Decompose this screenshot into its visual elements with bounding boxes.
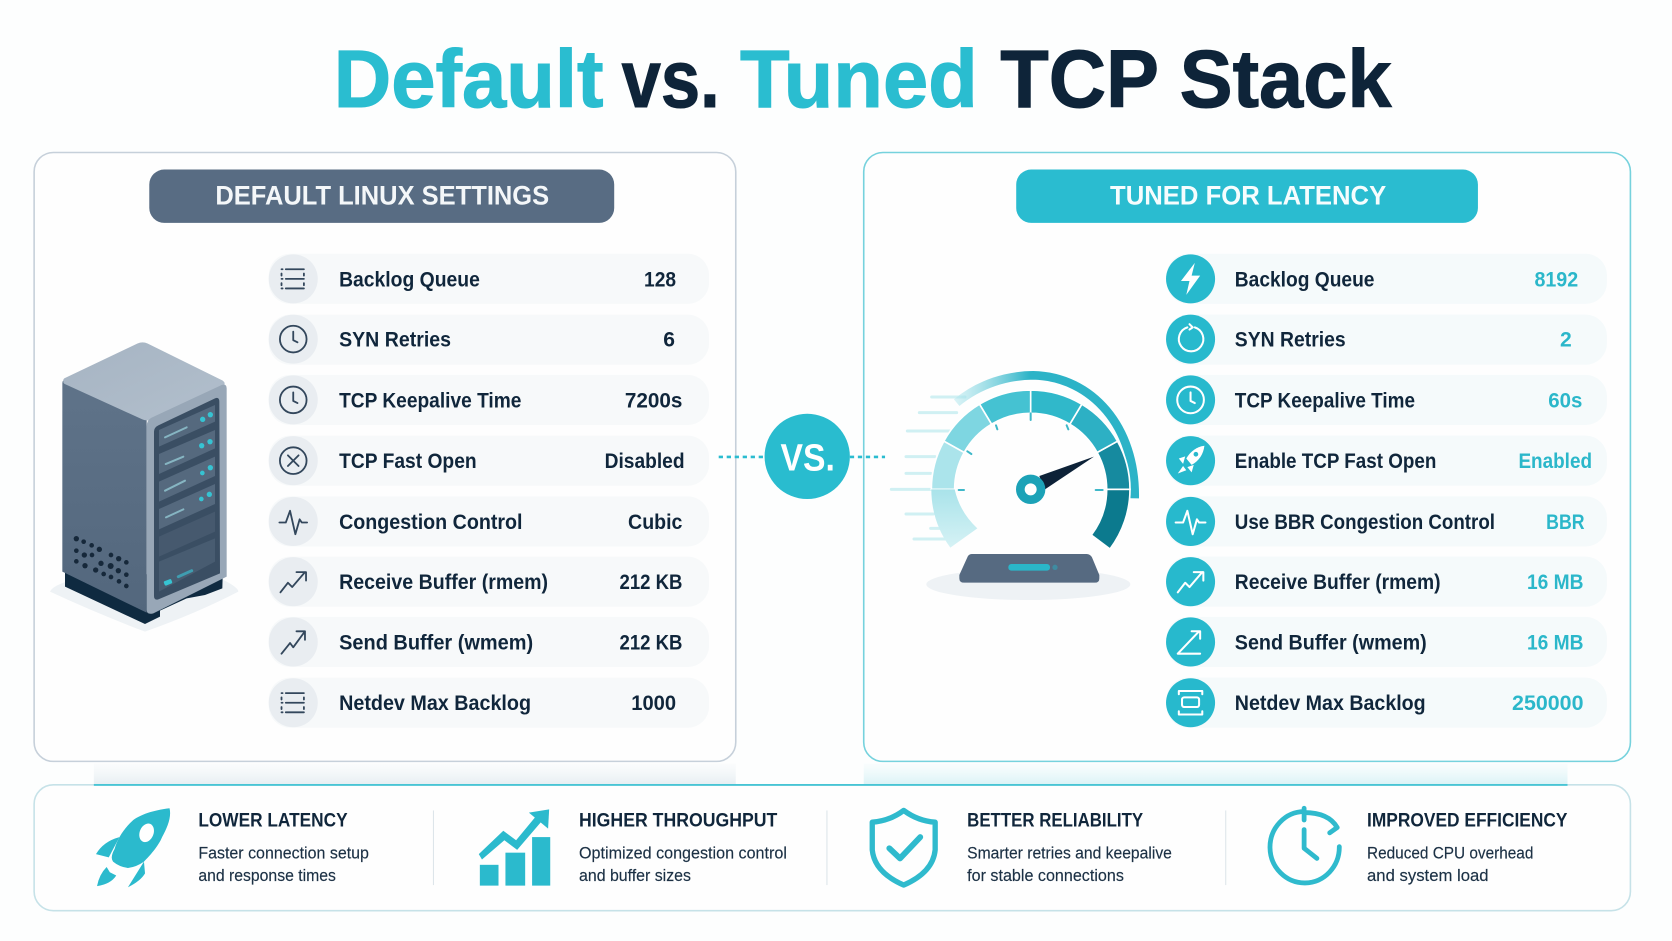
icon: rising bar chart	[479, 809, 550, 886]
row: syn retries	[269, 315, 709, 365]
benefit: higher throughput: HIGHER THROUGHPUT	[579, 809, 777, 831]
panel: default linux settings	[34, 152, 736, 761]
benefit: higher throughput: and buffer sizes	[579, 866, 691, 885]
benefit: lower latency	[96, 808, 369, 887]
icon: angled arrow	[1166, 617, 1215, 666]
icon: stopwatch	[1270, 808, 1339, 883]
heading: default linux settings: DEFAULT LINUX SETTINGS	[215, 181, 549, 211]
icon: clock	[1166, 375, 1215, 424]
icon: trend up	[269, 557, 318, 606]
row: netdev max backlog tuned	[1166, 678, 1607, 728]
badge: vs: VS.	[781, 436, 835, 479]
row: send buffer tuned: 16 MB	[1527, 630, 1583, 654]
row: tcp keepalive tuned: 60s	[1548, 388, 1582, 412]
icon: rocket	[96, 808, 170, 887]
icon: pulse	[1166, 497, 1215, 546]
row: backlog queue tuned: Backlog Queue	[1235, 267, 1375, 291]
row: backlog queue tuned	[1166, 254, 1607, 304]
row: syn retries tuned: SYN Retries	[1235, 328, 1346, 352]
row: backlog queue: 128	[644, 267, 676, 291]
icon: pulse	[269, 497, 318, 546]
icon: queue list	[269, 678, 318, 727]
row: tcp keepalive time	[269, 375, 709, 425]
row: enable tcp fast open	[1166, 436, 1607, 486]
benefit: lower latency: and response times	[198, 866, 336, 885]
benefit: lower latency: Faster connection setup	[198, 843, 369, 862]
row: bbr congestion control: Use BBR Congestion Control	[1235, 510, 1495, 534]
row: syn retries tuned: 2	[1560, 328, 1572, 352]
row: enable tcp fast open: Enabled	[1518, 449, 1592, 473]
row: receive buffer tuned: 16 MB	[1527, 570, 1583, 594]
row: congestion control	[269, 496, 709, 547]
row: tcp fast open	[269, 436, 709, 486]
benefit: improved efficiency: and system load	[1367, 866, 1489, 885]
icon: lightning bolt	[1166, 254, 1215, 303]
benefit: improved efficiency	[1270, 808, 1568, 885]
icon: trend up	[1166, 557, 1215, 606]
row: bbr congestion control: BBR	[1546, 510, 1585, 534]
row: tcp keepalive tuned: TCP Keepalive Time	[1235, 388, 1415, 412]
row: syn retries: SYN Retries	[339, 328, 451, 352]
row: backlog queue	[269, 254, 709, 304]
row: send buffer	[269, 617, 709, 667]
row: receive buffer tuned	[1166, 557, 1607, 607]
icon: clock	[269, 315, 318, 364]
row: enable tcp fast open: Enable TCP Fast Open	[1235, 449, 1436, 473]
row: tcp fast open: TCP Fast Open	[339, 449, 477, 473]
icon: retry circle	[1166, 315, 1215, 364]
row: send buffer tuned	[1166, 617, 1607, 667]
icon: x circle	[269, 436, 318, 485]
benefit: better reliability	[872, 809, 1172, 885]
row: receive buffer: 212 KB	[620, 570, 682, 594]
title: Default	[334, 34, 604, 125]
heading: tuned for latency	[1016, 170, 1478, 223]
benefit: higher throughput: Optimized congestion control	[579, 843, 787, 862]
row: netdev max backlog: 1000	[631, 691, 676, 715]
row: backlog queue tuned: 8192	[1534, 267, 1578, 291]
icon: trend arrow	[269, 617, 318, 666]
benefit: better reliability: Smarter retries and keepalive	[967, 843, 1172, 862]
heading: default linux settings	[149, 170, 614, 223]
badge: vs	[765, 414, 850, 499]
icon: stacked queue	[1166, 678, 1215, 727]
benefit: better reliability: BETTER RELIABILITY	[967, 809, 1143, 831]
icon: server tower	[50, 344, 238, 632]
panel: tuned for latency	[864, 152, 1630, 761]
benefit: lower latency: LOWER LATENCY	[198, 809, 348, 831]
row: send buffer tuned: Send Buffer (wmem)	[1235, 630, 1427, 654]
row: syn retries: 6	[663, 328, 675, 352]
connector: dotted vs line	[719, 456, 885, 458]
row: congestion control: Cubic	[628, 510, 683, 534]
heading: tuned for latency: TUNED FOR LATENCY	[1110, 181, 1386, 211]
benefit: higher throughput	[479, 809, 787, 886]
row: netdev max backlog	[269, 678, 709, 728]
row: receive buffer tuned: Receive Buffer (rmem)	[1235, 570, 1441, 594]
panel: benefits strip	[34, 764, 1630, 911]
title	[334, 34, 1392, 125]
title: vs.	[622, 34, 720, 125]
icon: speedometer gauge	[891, 375, 1135, 600]
icon: clock	[269, 375, 318, 424]
row: send buffer: Send Buffer (wmem)	[339, 630, 533, 654]
row: receive buffer	[269, 557, 709, 607]
row: receive buffer: Receive Buffer (rmem)	[339, 570, 548, 594]
row: tcp keepalive tuned	[1166, 375, 1607, 425]
row: congestion control: Congestion Control	[339, 510, 523, 534]
row: syn retries tuned	[1166, 315, 1607, 365]
title: Tuned	[740, 34, 978, 125]
row: backlog queue: Backlog Queue	[339, 267, 480, 291]
row: tcp keepalive time: 7200s	[625, 388, 682, 412]
row: tcp keepalive time: TCP Keepalive Time	[339, 388, 522, 412]
benefit: improved efficiency: Reduced CPU overhead	[1367, 843, 1533, 862]
benefit: better reliability: for stable connections	[967, 866, 1124, 885]
row: tcp fast open: Disabled	[605, 449, 685, 473]
row: bbr congestion control	[1166, 496, 1607, 547]
row: send buffer: 212 KB	[620, 630, 682, 654]
row: netdev max backlog tuned: Netdev Max Backlog	[1235, 691, 1426, 715]
row: netdev max backlog tuned: 250000	[1512, 691, 1583, 715]
icon: rocket	[1166, 436, 1215, 485]
title: TCP Stack	[1000, 34, 1392, 125]
icon: shield check	[872, 810, 935, 885]
benefit: improved efficiency: IMPROVED EFFICIENCY	[1367, 809, 1567, 831]
row: netdev max backlog: Netdev Max Backlog	[339, 691, 531, 715]
icon: queue list	[269, 254, 318, 303]
